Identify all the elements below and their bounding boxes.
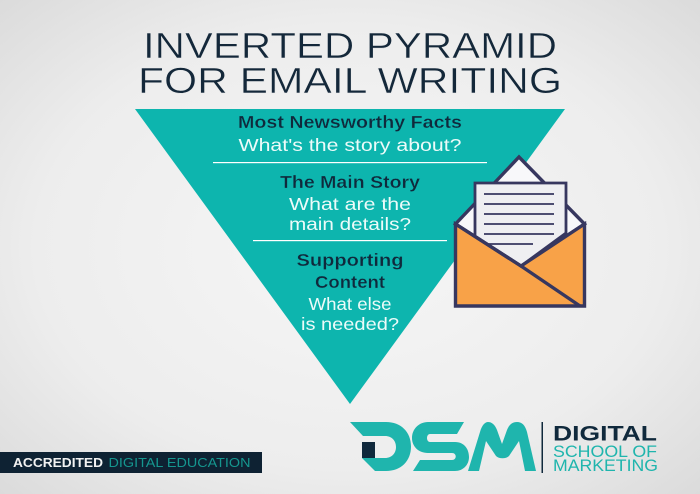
logo mark DSM <box>350 422 536 471</box>
badge: accredited digital education: ACCREDITED <box>13 455 103 470</box>
tier 3: supporting content: Supporting <box>296 250 404 270</box>
title <box>138 25 562 101</box>
tier 2: the main story: The Main Story <box>280 172 420 192</box>
tier 1: most newsworthy facts <box>238 112 462 155</box>
tier 3: supporting content <box>296 250 404 334</box>
tier 1: most newsworthy facts: Most Newsworthy Facts <box>238 112 462 132</box>
tier 3: supporting content: is needed? <box>301 314 399 334</box>
title: INVERTED PYRAMID <box>143 25 557 66</box>
tier 3: supporting content: What else <box>308 294 392 314</box>
logo wordmark <box>553 422 658 475</box>
logo wordmark: MARKETING <box>553 456 658 475</box>
logo wordmark: DIGITAL <box>553 422 657 446</box>
tier 1: most newsworthy facts: What's the story about? <box>238 135 462 155</box>
logo wordmark: SCHOOL OF <box>553 442 657 461</box>
icon: open envelope with letter <box>456 157 584 306</box>
panel: inverted pyramid <box>135 109 565 404</box>
logo: Digital School of Marketing <box>350 422 658 475</box>
tier 2: the main story: main details? <box>289 214 411 234</box>
tier 3: supporting content: Content <box>315 272 385 292</box>
pyramid triangle <box>135 109 565 404</box>
title: FOR EMAIL WRITING <box>138 60 562 101</box>
tier 2: the main story: What are the <box>289 194 411 214</box>
badge: accredited digital education <box>0 452 262 473</box>
badge: accredited digital education: DIGITAL EDUCATION <box>108 455 250 470</box>
tier 2: the main story <box>280 172 420 234</box>
